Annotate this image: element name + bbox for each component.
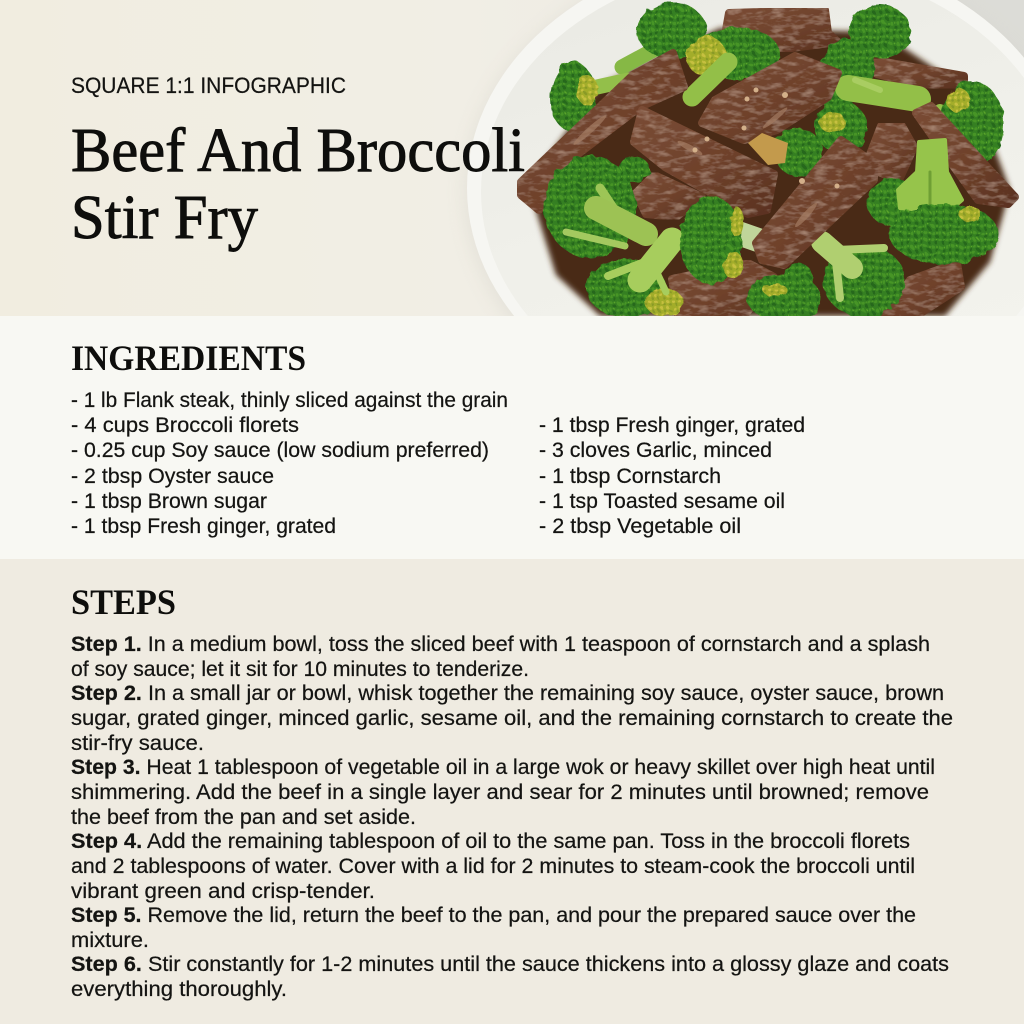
broccoli: bottom centre floret [747, 263, 821, 322]
beef: front slice [756, 140, 874, 265]
step 2: Step 2. In a small jar or bowl, whisk together the remaining soy sauce, oyster sauce, brown [71, 682, 944, 705]
ingredient list: left column: - 0.25 cup Soy sauce (low sodium preferred) [71, 439, 489, 462]
step 5: Step 5. Remove the lid, return the beef to the pan, and pour the prepared sauce over the [71, 904, 916, 927]
panel: steps [0, 559, 1024, 1024]
step 3: the beef from the pan and set aside. [71, 806, 416, 829]
beef: back slices [636, 10, 964, 320]
ingredient list: left column: - 2 tbsp Oyster sauce [71, 465, 274, 488]
step 4: and 2 tablespoons of water. Cover with a lid for 2 minutes to steam-cook the broccoli until [71, 855, 915, 878]
broccoli: right-centre floret [820, 39, 918, 112]
beef: long left slice [521, 53, 684, 210]
step 5 [71, 904, 916, 952]
step 2: sugar, grated ginger, minced garlic, sesame oil, and the remaining cornstarch to create the [71, 707, 953, 730]
ingredient list: left column: - 1 lb Flank steak, thinly sliced against the grain [71, 389, 508, 412]
photo: beef and broccoli bowl [467, 0, 1024, 316]
step 4: vibrant green and crisp-tender. [71, 880, 375, 903]
sauce pool [528, 28, 1010, 316]
title [71, 117, 525, 252]
ingredient list: right column: - 1 tbsp Fresh ginger, grated [539, 414, 805, 437]
title: Beef And Broccoli [71, 117, 525, 185]
broccoli: bottom right floret [822, 242, 905, 317]
ingredient list: right column [539, 414, 805, 538]
ingredient list: right column: - 2 tbsp Vegetable oil [539, 515, 741, 538]
step 5: mixture. [71, 929, 149, 952]
ingredient list: right column: - 3 cloves Garlic, minced [539, 439, 772, 462]
step 1: of soy sauce; let it sit for 10 minutes to tenderize. [71, 658, 529, 681]
title: Stir Fry [71, 184, 258, 252]
step 3 [71, 756, 935, 829]
broccoli: back florets [550, 3, 911, 132]
garlic chunk [748, 133, 788, 165]
panel: header [467, 0, 1024, 316]
broccoli: top centre floret [686, 28, 780, 97]
broccoli: lower right floret [867, 140, 999, 264]
ingredient list: left column [71, 389, 508, 538]
step 3: shimmering. Add the beef in a single layer and sear for 2 minutes until browned; remove [71, 781, 929, 804]
ingredient list: right column: - 1 tsp Toasted sesame oil [539, 490, 785, 513]
eyebrow label: SQUARE 1:1 INFOGRAPHIC [71, 73, 346, 98]
step 4 [71, 830, 915, 903]
step 2: stir-fry sauce. [71, 732, 204, 755]
beef: right long slice [916, 106, 1015, 204]
panel: ingredients [0, 316, 1024, 559]
broccoli: centre stem floret [680, 196, 758, 284]
broccoli: right floret [940, 81, 1004, 167]
step 4: Step 4. Add the remaining tablespoon of oil to the same pan. Toss in the broccoli florets [71, 830, 910, 853]
ingredient list: left column: - 1 tbsp Fresh ginger, grated [71, 515, 336, 538]
step 6: Step 6. Stir constantly for 1-2 minutes until the sauce thickens into a glossy glaze and coats [71, 953, 949, 976]
step 6: everything thoroughly. [71, 978, 287, 1001]
step 1: Step 1. In a medium bowl, toss the sliced beef with 1 teaspoon of cornstarch and a splash [71, 633, 930, 656]
ingredient list: left column: - 1 tbsp Brown sugar [71, 490, 267, 513]
ingredient list: right column: - 1 tbsp Cornstarch [539, 465, 721, 488]
heading: steps: STEPS [71, 582, 176, 622]
step 2 [71, 682, 953, 755]
broccoli: bottom left floret [586, 240, 683, 317]
heading: ingredients: INGREDIENTS [71, 338, 306, 378]
beef: centre slice [634, 110, 774, 214]
ingredient list: left column: - 4 cups Broccoli florets [71, 414, 299, 437]
step 6 [71, 953, 949, 1001]
broccoli: left big floret [544, 156, 650, 258]
beef: upper centre slice [702, 56, 838, 140]
broccoli: centre floret [774, 101, 867, 176]
step 1 [71, 633, 930, 681]
step 3: Step 3. Heat 1 tablespoon of vegetable oil in a large wok or heavy skillet over high heat until [71, 756, 935, 779]
